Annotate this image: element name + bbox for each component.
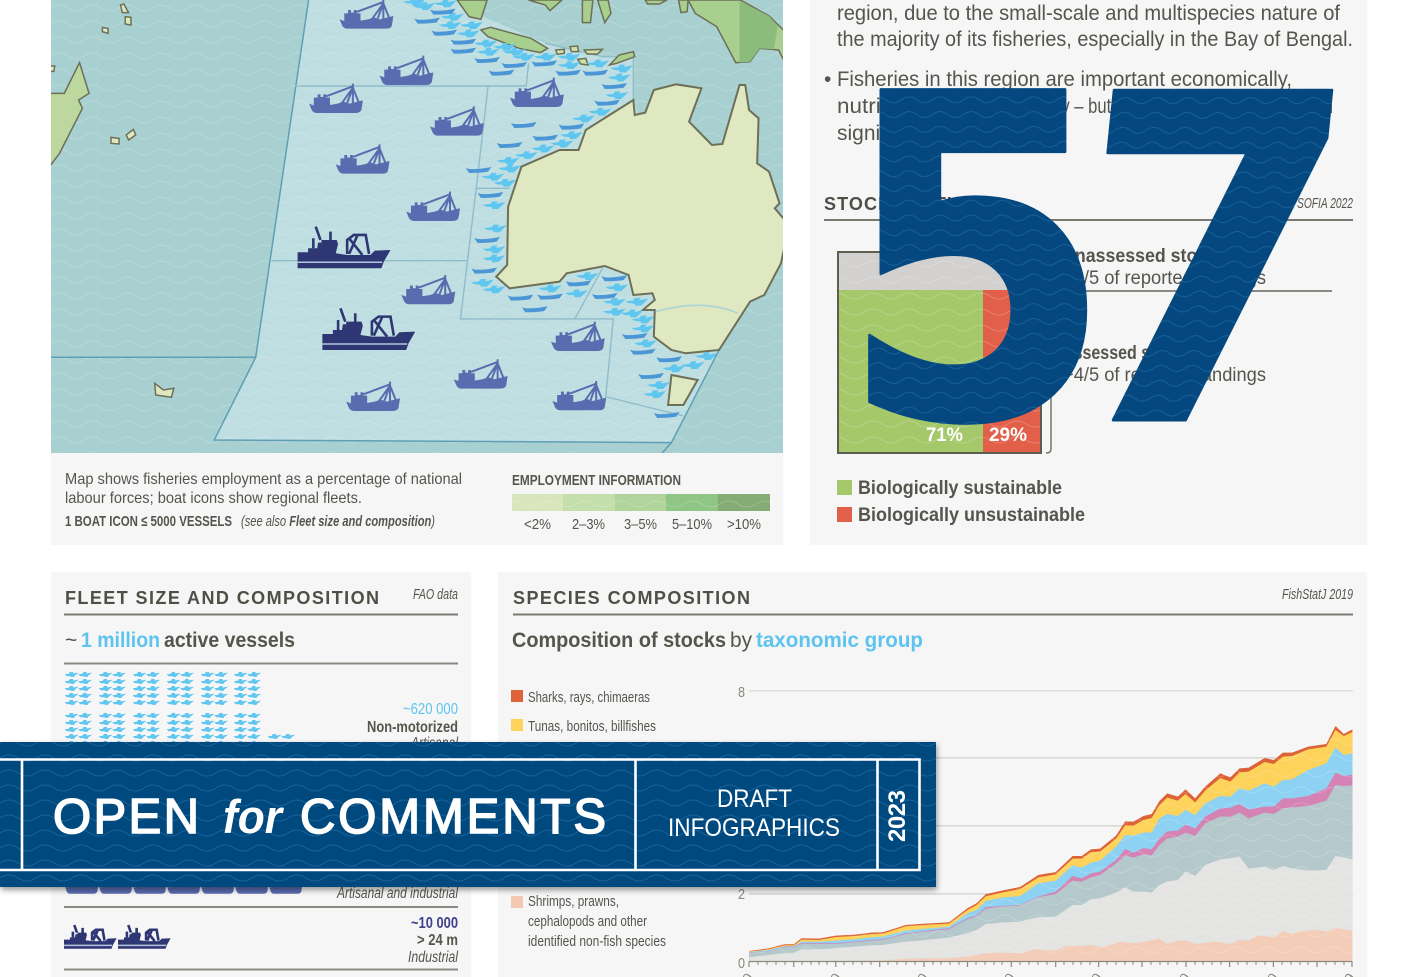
- stock share labels: [1060, 246, 1332, 386]
- legend: taxonomic groups: Tunas, bonitos, billfishes: [528, 718, 656, 735]
- legend: taxonomic groups: Sharks, rays, chimaeras: [528, 689, 650, 706]
- legend: stock status: Biologically unsustainable: [858, 505, 1085, 526]
- overview text: [824, 2, 1353, 145]
- subheading: active vessels: active vessels: [164, 629, 295, 652]
- legend: employment information: >10%: [727, 516, 761, 533]
- legend: employment information: EMPLOYMENT INFORMATION: [512, 472, 681, 489]
- legend: employment information: 2–3%: [572, 516, 605, 533]
- panel: map: [50, 0, 793, 453]
- legend: taxonomic groups: [511, 689, 666, 950]
- label: non-motorized: Non-motorized: [367, 719, 458, 736]
- heading: species composition: FishStatJ 2019: [1282, 586, 1353, 603]
- stock share labels: Assessed stocks: [1062, 343, 1192, 364]
- label: artisanal and industrial: Artisanal and industrial: [336, 885, 458, 902]
- heading: fleet size: FLEET SIZE AND COMPOSITION: [65, 588, 379, 608]
- panel: overview and stock status: [810, 0, 1367, 545]
- caption text: labour forces; boat icons show regional fleets.: [65, 490, 362, 507]
- boats: small non-motorized fleet: [403, 0, 718, 418]
- banner: open for comments: [0, 742, 936, 887]
- subheading: composition of stocks: taxonomic group: [756, 629, 923, 652]
- x axis with year labels: [725, 962, 1358, 977]
- label: industrial: > 24 m: [417, 932, 458, 949]
- subheading: active vessels: ~: [65, 629, 77, 652]
- chart: stock status square: [838, 252, 1051, 453]
- legend: employment information: 5–10%: [672, 516, 712, 533]
- label: non-motorized: Artisanal: [410, 735, 458, 752]
- legend: employment information: 3–5%: [624, 516, 657, 533]
- heading: fleet size: FAO data: [413, 586, 458, 603]
- overview text: significant: [837, 122, 931, 145]
- overview text: Fisheries in this region are important economically,: [837, 68, 1292, 91]
- subheading: active vessels: [64, 629, 458, 664]
- overview text: lly – but catch is not fully reported and: [1054, 95, 1333, 118]
- banner title: [53, 790, 606, 844]
- banner title: COMMENTS: [300, 790, 606, 844]
- y axis labels and grid lines: [738, 684, 1353, 972]
- boats: industrial ships: [298, 227, 415, 350]
- label: non-motorized: [367, 701, 458, 752]
- subheading: composition of stocks: by: [730, 629, 752, 652]
- banner subtitle: INFOGRAPHICS: [668, 814, 840, 842]
- heading: stock status: [824, 194, 1353, 221]
- stock share labels: ~4/5 of reported landings: [1063, 365, 1266, 386]
- panel: map caption: [51, 453, 783, 545]
- stock share labels: Unassessed stocks: [1062, 246, 1227, 267]
- chart: stacked area by taxonomic group: [725, 684, 1358, 977]
- banner subtitle: [668, 785, 840, 842]
- page number: 57: 5: [839, 0, 1113, 523]
- legend: employment information: [512, 472, 770, 533]
- overview text: •: [824, 68, 831, 91]
- boats: regional fleet icons: [309, 0, 606, 411]
- label: industrial: Industrial: [408, 949, 458, 966]
- stacked areas: [749, 726, 1352, 962]
- legend: taxonomic groups: cephalopods and other: [528, 913, 647, 930]
- banner frame: [0, 760, 920, 870]
- banner title: for: [223, 790, 285, 843]
- banner title: OPEN: [53, 790, 199, 844]
- label: non-motorized: ~620 000: [403, 701, 458, 718]
- overview text: region, due to the small-scale and multispecies nature of: [837, 2, 1340, 25]
- legend: taxonomic groups: identified non-fish species: [528, 933, 666, 950]
- icons: non-motorized boats: [65, 672, 294, 746]
- subheading: composition of stocks: Composition of stocks: [512, 629, 726, 652]
- heading: fleet size: [64, 586, 458, 616]
- y axis labels and grid lines: 2: [738, 886, 745, 903]
- stock share labels: ~1/5 of reported landings: [1063, 268, 1266, 289]
- land: islands to the west: [50, 4, 174, 397]
- heading: stock status: STOCK STATUS: [824, 194, 973, 214]
- chart: stock status square: 71%: [926, 425, 963, 446]
- y axis labels and grid lines: 8: [738, 684, 745, 701]
- label: industrial: ~10 000: [411, 915, 458, 932]
- panel: species composition: [498, 572, 1367, 977]
- legend: stock status: Biologically sustainable: [858, 478, 1062, 499]
- banner year: 2023: [884, 790, 911, 842]
- heading: species composition: SPECIES COMPOSITION: [513, 588, 750, 608]
- icons: industrial ships: [64, 925, 171, 949]
- legend: stock status: [837, 478, 1085, 526]
- heading: species composition: [513, 586, 1353, 616]
- subheading: active vessels: 1 million: [81, 629, 160, 652]
- chart: stock status square: 29%: [989, 425, 1027, 446]
- overview text: the majority of its fisheries, especially in the Bay of Bengal.: [837, 28, 1353, 51]
- overview text: nutritionally and socia: [837, 95, 1053, 118]
- heading: stock status: SOFIA 2022: [1297, 195, 1353, 212]
- panel: fleet size and composition: [51, 572, 471, 977]
- caption text: [65, 471, 462, 530]
- legend: employment information: <2%: [524, 516, 551, 533]
- caption text: (see also Fleet size and composition): [241, 513, 435, 530]
- icons: motorized boats: [65, 870, 302, 894]
- caption text: Map shows fisheries employment as a percentage of national: [65, 471, 462, 488]
- legend: taxonomic groups: Shrimps, prawns,: [528, 893, 619, 910]
- label: industrial: [408, 915, 458, 966]
- page number: 57: [839, 0, 1373, 527]
- land: islands to the north: [456, 0, 783, 66]
- banner subtitle: DRAFT: [717, 785, 792, 813]
- land: Australia: [496, 84, 789, 405]
- caption text: 1 BOAT ICON ≤ 5000 VESSELS: [65, 513, 232, 530]
- page number: 57: 7: [1043, 0, 1373, 527]
- subheading: composition of stocks: [512, 629, 923, 652]
- y axis labels and grid lines: 0: [738, 955, 745, 972]
